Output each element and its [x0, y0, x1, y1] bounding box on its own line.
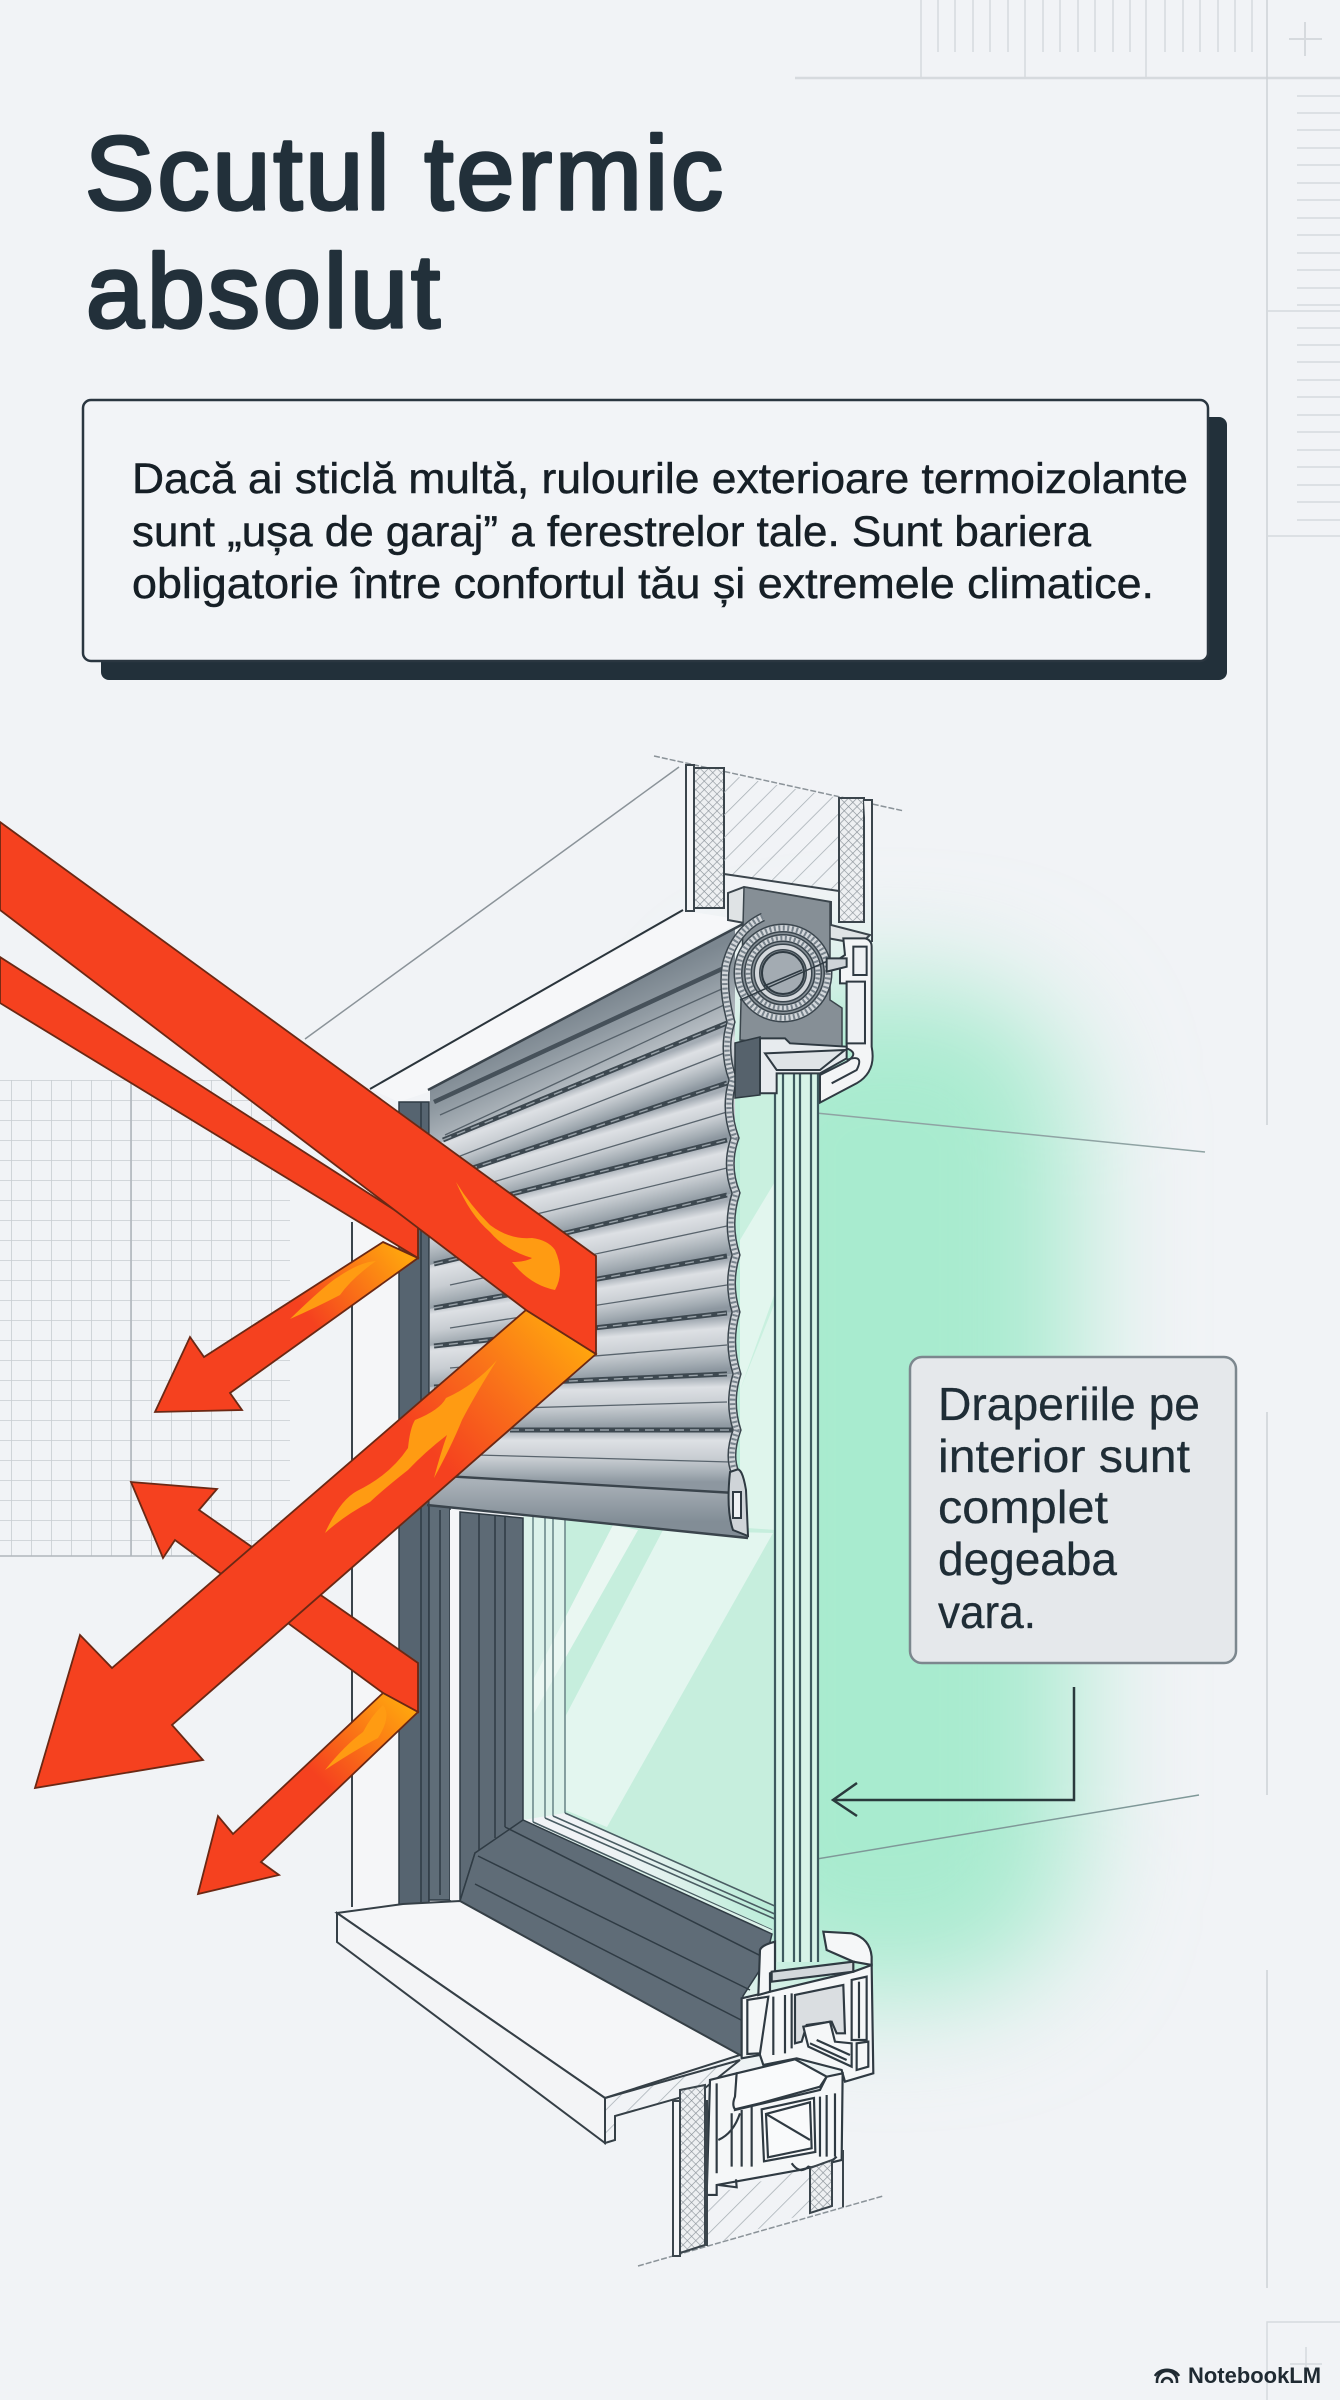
- title: Scutul termic: [85, 116, 723, 232]
- intro panel: sunt „ușa de garaj” a ferestrelor tale. Sunt bariera: [132, 508, 1091, 556]
- window illustration: [305, 756, 1205, 2266]
- arrow: incoming thin beam: [0, 957, 418, 1258]
- title: [85, 116, 723, 350]
- green interior glow: [700, 985, 1075, 1995]
- roller coil: [738, 928, 830, 1018]
- frame body: [707, 2073, 843, 2195]
- callout box: Draperiile pe: [938, 1378, 1200, 1430]
- shutter slats: [427, 924, 748, 1538]
- top frame profile: [760, 938, 873, 1103]
- window glass: [523, 1060, 777, 1938]
- arrow: small reflected upper: [155, 1242, 418, 1412]
- callout box: complet: [938, 1481, 1108, 1533]
- intro panel: Dacă ai sticlă multă, rulourile exterioare termoizolante: [132, 455, 1188, 503]
- grid panel: [0, 1080, 290, 1556]
- arrow: callout leader to glass: [833, 1687, 1074, 1816]
- brand mark: NotebookLM: NotebookLM: [1188, 2363, 1321, 2388]
- intro panel: [83, 400, 1227, 680]
- blueprint decoration: [795, 0, 1340, 2400]
- title: absolut: [86, 234, 440, 350]
- sash body: [742, 1965, 873, 2082]
- arrow: return upper-left: [131, 1482, 418, 1712]
- lower roller block: [735, 1037, 760, 1098]
- arrow: small reflected lower: [198, 1693, 418, 1894]
- bottom wall section: [673, 2085, 843, 2256]
- window frame jamb and sash: [399, 1102, 772, 2057]
- callout box: [910, 1357, 1236, 1663]
- wall construction lines: [305, 756, 1205, 2266]
- arrow: big reflected beam: [35, 1310, 596, 1788]
- callout box: interior sunt: [938, 1430, 1190, 1482]
- callout box: degeaba: [938, 1533, 1117, 1585]
- triple glazing section: [775, 1067, 818, 1962]
- top wall section: [686, 765, 872, 944]
- intro panel: obligatorie între confortul tău și extremele climatice.: [132, 560, 1154, 608]
- callout box: vara.: [938, 1586, 1036, 1638]
- sill: [337, 1901, 740, 2143]
- shutter curtain edge: [725, 917, 763, 1536]
- bottom frame profile: [707, 1932, 873, 2195]
- roller box interior: [740, 887, 842, 1048]
- red heat arrows: [0, 822, 596, 1894]
- soffit and reveal: [352, 910, 744, 1912]
- arrow: big incoming beam: [0, 822, 596, 1354]
